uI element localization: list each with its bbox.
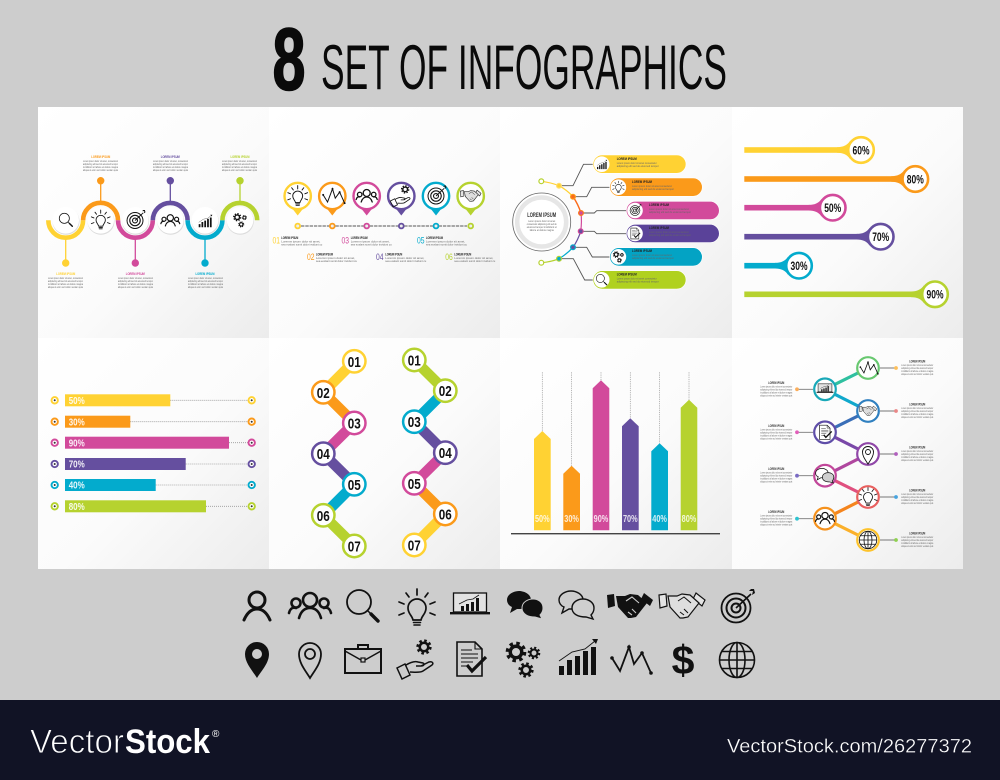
side text: LOREM IPSUM — [909, 402, 925, 406]
step text: sea eoslant sumit dolor invidunt cu — [454, 259, 496, 263]
bar text: Lorem ipsum dolor sit amet consectetur — [649, 207, 689, 211]
side text: incididunt ut labore et dolore magna — [760, 476, 793, 480]
icon: pin outline — [299, 643, 321, 678]
step text: LOREM IPSUM — [426, 236, 443, 240]
icon: growth chart — [559, 639, 598, 675]
baseline — [511, 533, 720, 534]
labels: LOREM IPSUM — [56, 272, 75, 276]
left chain: 04 — [317, 446, 330, 463]
side text: LOREM IPSUM — [909, 446, 925, 450]
icon: dollar: $ — [672, 637, 695, 683]
step text: Loremm ipsum dolor sit amet, — [454, 256, 493, 260]
step text: 06 — [445, 252, 453, 263]
body text: adipiscing elit sed do eiusmod tempor — [118, 279, 153, 283]
side text: LOREM IPSUM — [768, 510, 784, 514]
side text: Lorem ipsum dolor sit amet consectetur — [901, 492, 933, 496]
right chain: 07 — [408, 538, 421, 554]
step text: 05 — [417, 236, 424, 246]
labels — [56, 155, 250, 276]
step text: LOREM IPSUM — [385, 252, 402, 256]
step text: LOREM IPSUM — [316, 252, 333, 256]
right chain: 06 — [439, 506, 452, 524]
bar text: adipiscing elit sed do eiusmod tempor — [649, 233, 691, 237]
bar text: Lorem ipsum dolor sit amet consectetur — [632, 184, 672, 188]
body text: Lorem ipsum dolor sit amet, consectetur — [222, 159, 257, 163]
side text: adipiscing elit sed do eiusmod tempor — [901, 452, 933, 456]
icon: zigzag line — [610, 645, 653, 675]
side text: Lorem ipsum dolor sit amet consectetur — [901, 449, 933, 453]
side text: LOREM IPSUM — [768, 467, 784, 471]
icon: group — [289, 593, 331, 618]
body text: Lorem ipsum dolor sit amet, consectetur — [188, 276, 223, 280]
bar text: adipiscing elit sed do eiusmod tempor — [632, 187, 674, 191]
step text: sea eoslant sumit dolor invidunt cu — [426, 242, 467, 246]
icon: target — [722, 589, 755, 622]
stem dots — [795, 366, 898, 542]
side text: Lorem ipsum dolor sit amet consectetur — [901, 406, 933, 410]
column values: 90% — [594, 514, 609, 525]
panel: arrow column chart — [511, 372, 720, 534]
step text: 02 — [307, 252, 314, 263]
step text: Loremm ipsum dolor sit amet, — [351, 239, 390, 243]
bar text — [617, 157, 691, 284]
body text: aliqua ut enim ad minim veniam quis — [83, 168, 118, 172]
end dots — [52, 397, 255, 509]
bar text: Lorem ipsum dolor sit amet consectetur — [617, 161, 657, 165]
icon set: bottom row — [245, 637, 754, 683]
lollipop 60% — [744, 137, 874, 163]
central circle — [513, 193, 571, 251]
bar values: 70% — [69, 459, 85, 471]
footer logo: ® — [212, 729, 220, 740]
central circle: eiusmod tempor incididunt ut — [527, 225, 557, 229]
title — [272, 10, 727, 108]
body text: aliqua ut enim ad minim veniam quis — [188, 285, 223, 289]
side text: incididunt ut labore et dolore magna — [901, 541, 934, 545]
title: 8 — [272, 10, 306, 108]
lollipop 90%: 90% — [926, 288, 944, 302]
body text: adipiscing elit sed do eiusmod tempor — [188, 279, 223, 283]
right chain: 02 — [439, 383, 452, 400]
bar text: adipiscing elit sed do eiusmod tempor — [649, 210, 691, 214]
side text: LOREM IPSUM — [768, 424, 784, 428]
central circle: LOREM IPSUM — [527, 213, 556, 219]
side text: LOREM IPSUM — [909, 532, 925, 536]
bar text: LOREM IPSUM — [617, 157, 637, 161]
body text: aliqua ut enim ad minim veniam quis — [118, 285, 153, 289]
stems — [797, 368, 895, 540]
panel: zigzag nodes — [760, 357, 934, 551]
side text: incididunt ut labore et dolore magna — [901, 455, 934, 459]
step text: Loremm ipsum dolor sit amet, — [281, 239, 320, 243]
body text: Lorem ipsum dolor sit amet, consectetur — [153, 159, 188, 163]
bar values: 30% — [69, 416, 85, 428]
icons — [59, 210, 246, 229]
panel: pin timeline — [272, 183, 496, 263]
arc nodes — [539, 179, 583, 265]
side text: aliqua ut enim ad minim veniam quis — [901, 372, 934, 376]
labels: LOREM IPSUM — [91, 155, 110, 159]
lollipop 50% — [744, 195, 846, 220]
bar values: 50% — [69, 395, 85, 407]
side text: Lorem ipsum dolor sit amet consectetur — [901, 535, 933, 539]
column values: 50% — [535, 514, 550, 525]
side text: incididunt ut labore et dolore magna — [760, 520, 793, 524]
body text: aliqua ut enim ad minim veniam quis — [48, 285, 83, 289]
side text: adipiscing elit sed do eiusmod tempor — [760, 516, 792, 520]
step text: sea eoslant sumit dolor invidunt cu — [351, 242, 392, 246]
side text: Lorem ipsum dolor sit amet consectetur — [760, 514, 792, 518]
right chain: 04 — [439, 445, 452, 462]
body text: incididunt ut labore et dolore magna — [118, 282, 153, 286]
side text: LOREM IPSUM — [768, 381, 784, 385]
body text: aliqua ut enim ad minim veniam quis — [222, 168, 257, 172]
bar icons — [596, 160, 641, 285]
arc segments — [541, 181, 581, 263]
icon: handshake solid — [607, 593, 653, 618]
bar text: LOREM IPSUM — [617, 272, 637, 276]
icon: handshake outline — [659, 593, 705, 618]
panel: numbered chains — [312, 349, 456, 557]
panel: wave timeline — [48, 155, 257, 289]
lollipop 90% — [744, 282, 948, 307]
column values: 40% — [652, 514, 667, 525]
side text: Lorem ipsum dolor sit amet consectetur — [760, 428, 792, 432]
body text: incididunt ut labore et dolore magna — [153, 165, 188, 169]
white nodes — [52, 208, 254, 235]
icon: search — [347, 590, 378, 621]
body text — [48, 159, 257, 289]
side text: Lorem ipsum dolor sit amet consectetur — [901, 363, 933, 367]
central circle: labore et dolore magna — [530, 228, 554, 232]
left chain: 07 — [348, 538, 361, 556]
step text: Loremm ipsum dolor sit amet, — [426, 239, 465, 243]
icon: globe — [720, 642, 754, 678]
bar text: adipiscing elit sed do eiusmod tempor — [632, 256, 674, 260]
left chain: 03 — [348, 416, 361, 432]
nodes — [814, 357, 879, 551]
footer logo: Stock — [125, 723, 210, 761]
side text: incididunt ut labore et dolore magna — [901, 412, 934, 416]
step text: 01 — [272, 236, 280, 246]
icon: hand with gear — [397, 641, 433, 679]
column values: 80% — [682, 514, 697, 525]
labels: LOREM IPSUM — [230, 155, 250, 159]
bar text: LOREM IPSUM — [649, 226, 669, 230]
lollipop 50%: 50% — [824, 201, 841, 215]
bar text: adipiscing elit sed do eiusmod tempor — [617, 164, 659, 168]
body text: aliqua ut enim ad minim veniam quis — [153, 168, 188, 172]
bar text: Lorem ipsum dolor sit amet consectetur — [632, 253, 672, 257]
lollipop 30%: 30% — [790, 259, 808, 273]
lollipop 70% — [744, 224, 894, 250]
icon: chat outline — [559, 591, 594, 619]
side text — [760, 360, 934, 548]
bar text: Lorem ipsum dolor sit amet consectetur — [617, 276, 657, 280]
right chain: 03 — [408, 414, 421, 431]
dashed timeline — [301, 225, 467, 227]
footer reference: VectorStock.com/26277372 — [727, 736, 972, 758]
column values: 70% — [623, 514, 638, 525]
side text: aliqua ut enim ad minim veniam quis — [901, 458, 934, 462]
central circle: Lorem ipsum dolor sit amet — [528, 219, 555, 223]
dashed guides — [542, 372, 689, 466]
stems and dots — [62, 177, 244, 267]
bar values: 40% — [69, 480, 85, 492]
side text: Lorem ipsum dolor sit amet consectetur — [760, 470, 792, 474]
side text: incididunt ut labore et dolore magna — [901, 369, 934, 373]
step text: LOREM IPSUM — [281, 236, 298, 240]
lollipop 80% — [744, 166, 928, 192]
body text: incididunt ut labore et dolore magna — [83, 165, 118, 169]
icon: user — [244, 592, 270, 620]
icon: briefcase — [345, 645, 381, 673]
bar values — [69, 395, 85, 513]
node icons — [816, 361, 879, 549]
left chain — [312, 350, 365, 557]
body text: adipiscing elit sed do eiusmod tempor — [222, 162, 257, 166]
lollipop 30% — [744, 253, 812, 278]
step text: LOREM IPSUM — [454, 252, 471, 256]
body text: adipiscing elit sed do eiusmod tempor — [83, 162, 118, 166]
footer logo: Vector — [30, 723, 124, 761]
bar text: LOREM IPSUM — [632, 249, 652, 253]
icon: laptop chart — [450, 593, 490, 614]
icon: light bulb — [399, 589, 435, 625]
side text: adipiscing elit sed do eiusmod tempor — [760, 474, 792, 478]
body text: incididunt ut labore et dolore magna — [48, 282, 83, 286]
lollipop 80%: 80% — [907, 172, 924, 186]
side text: aliqua ut enim ad minim veniam quis — [760, 394, 793, 398]
side text: adipiscing elit sed do eiusmod tempor — [901, 538, 933, 542]
central circle: consectetur adipiscing elit sed do — [527, 222, 557, 226]
side text: incididunt ut labore et dolore magna — [760, 390, 793, 394]
left chain: 05 — [348, 477, 361, 494]
footer bar — [0, 700, 1000, 780]
columns — [534, 380, 697, 530]
labels: LOREM IPSUM — [161, 155, 180, 159]
body text: Lorem ipsum dolor sit amet, consectetur — [48, 276, 83, 280]
right chain: 01 — [408, 352, 421, 370]
body text: Lorem ipsum dolor sit amet, consectetur — [83, 159, 118, 163]
side text: aliqua ut enim ad minim veniam quis — [901, 544, 934, 548]
panel: lollipop percentages — [744, 137, 948, 307]
panel: branching labels — [513, 155, 719, 289]
connector lines — [559, 164, 626, 280]
left chain: 06 — [317, 508, 330, 525]
side text: adipiscing elit sed do eiusmod tempor — [760, 430, 792, 434]
bar icon discs — [594, 156, 643, 288]
side text: aliqua ut enim ad minim veniam quis — [901, 501, 934, 505]
bars — [65, 394, 229, 512]
right chain: 05 — [408, 476, 421, 493]
side text: incididunt ut labore et dolore magna — [760, 434, 793, 438]
step text: Loremm ipsum dolor sit amet, — [385, 256, 424, 260]
wave arcs — [48, 203, 257, 238]
body text: adipiscing elit sed do eiusmod tempor — [48, 279, 83, 283]
icon set: top row — [244, 589, 755, 625]
dotted leaders — [130, 400, 248, 506]
side text: LOREM IPSUM — [909, 488, 925, 492]
bar text: LOREM IPSUM — [649, 203, 669, 207]
side text: adipiscing elit sed do eiusmod tempor — [760, 388, 792, 392]
lollipop 60%: 60% — [852, 143, 870, 157]
column values: 30% — [564, 514, 579, 525]
bar text: adipiscing elit sed do eiusmod tempor — [617, 280, 659, 284]
labels: LOREM IPSUM — [126, 272, 145, 276]
bar values: 90% — [69, 437, 85, 449]
side text: incididunt ut labore et dolore magna — [901, 498, 934, 502]
panel: horizontal bars — [52, 394, 255, 513]
side text: aliqua ut enim ad minim veniam quis — [760, 480, 793, 484]
icon: document check — [457, 642, 486, 676]
side text: adipiscing elit sed do eiusmod tempor — [901, 495, 933, 499]
step text: sea eoslant sumit dolor invidunt cu — [281, 242, 323, 246]
labels: LOREM IPSUM — [196, 272, 215, 276]
step text: 03 — [342, 236, 349, 246]
left chain: 02 — [317, 385, 330, 402]
right chain — [403, 349, 456, 556]
icon: gears — [507, 643, 539, 676]
step text: LOREM IPSUM — [351, 236, 368, 240]
side text: aliqua ut enim ad minim veniam quis — [901, 415, 934, 419]
side text: adipiscing elit sed do eiusmod tempor — [901, 366, 933, 370]
body text: incididunt ut labore et dolore magna — [222, 165, 257, 169]
body text: incididunt ut labore et dolore magna — [188, 282, 223, 286]
connectors — [825, 368, 868, 540]
side text: aliqua ut enim ad minim veniam quis — [760, 436, 793, 440]
bar values: 80% — [69, 501, 85, 513]
panel: backgrounds — [38, 107, 963, 569]
left chain: 01 — [348, 354, 361, 371]
side text: aliqua ut enim ad minim veniam quis — [760, 522, 793, 526]
step text — [272, 236, 496, 263]
step text: sea eoslant sumit dolor invidunt cu — [316, 259, 357, 263]
step text: 04 — [376, 252, 384, 263]
step text: Loremm ipsum dolor sit amet, — [316, 256, 355, 260]
step text: sea eoslant sumit dolor invidunt cu — [385, 259, 427, 263]
timeline dots — [295, 224, 473, 228]
icon: chat solid — [507, 591, 543, 619]
pin icons — [288, 186, 481, 207]
side text: adipiscing elit sed do eiusmod tempor — [901, 409, 933, 413]
pins — [284, 183, 484, 216]
side text: LOREM IPSUM — [909, 360, 925, 364]
icon: pin solid — [245, 642, 269, 678]
body text: Lorem ipsum dolor sit amet, consectetur — [118, 276, 153, 280]
column values — [535, 514, 697, 525]
bar text: LOREM IPSUM — [632, 180, 652, 184]
lollipop 70%: 70% — [872, 230, 889, 244]
side text: Lorem ipsum dolor sit amet consectetur — [760, 384, 792, 388]
body text: adipiscing elit sed do eiusmod tempor — [153, 162, 188, 166]
label bars — [593, 155, 719, 289]
bar text: Lorem ipsum dolor sit amet consectetur — [649, 230, 689, 234]
footer logo — [30, 723, 220, 761]
